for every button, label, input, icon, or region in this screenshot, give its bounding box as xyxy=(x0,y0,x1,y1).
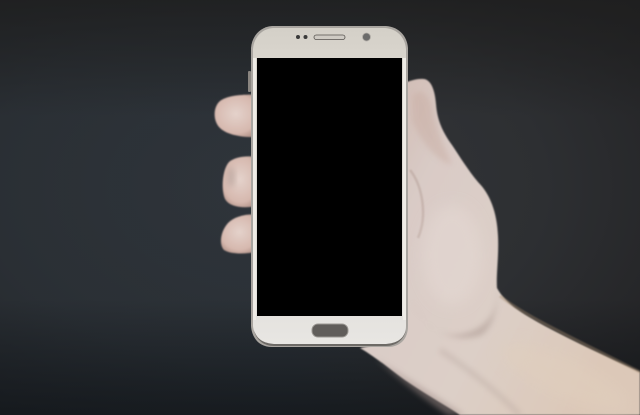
hand shading xyxy=(375,92,640,415)
ring finger xyxy=(221,214,262,254)
left side edge highlight xyxy=(253,58,256,320)
front sensor dots xyxy=(296,35,308,39)
bottom edge shadow xyxy=(254,330,406,346)
middle finger xyxy=(223,156,262,207)
hand and forearm xyxy=(360,79,640,415)
middle finger nail shadow xyxy=(227,167,235,187)
side button xyxy=(248,71,251,92)
home button xyxy=(312,324,348,337)
fingers behind the phone xyxy=(215,95,262,253)
phone body xyxy=(251,26,408,347)
front camera xyxy=(362,33,370,41)
smartphone xyxy=(248,26,408,347)
index finger xyxy=(215,95,262,137)
earpiece speaker xyxy=(314,35,345,40)
screen xyxy=(257,58,402,316)
right side edge highlight xyxy=(403,58,406,320)
